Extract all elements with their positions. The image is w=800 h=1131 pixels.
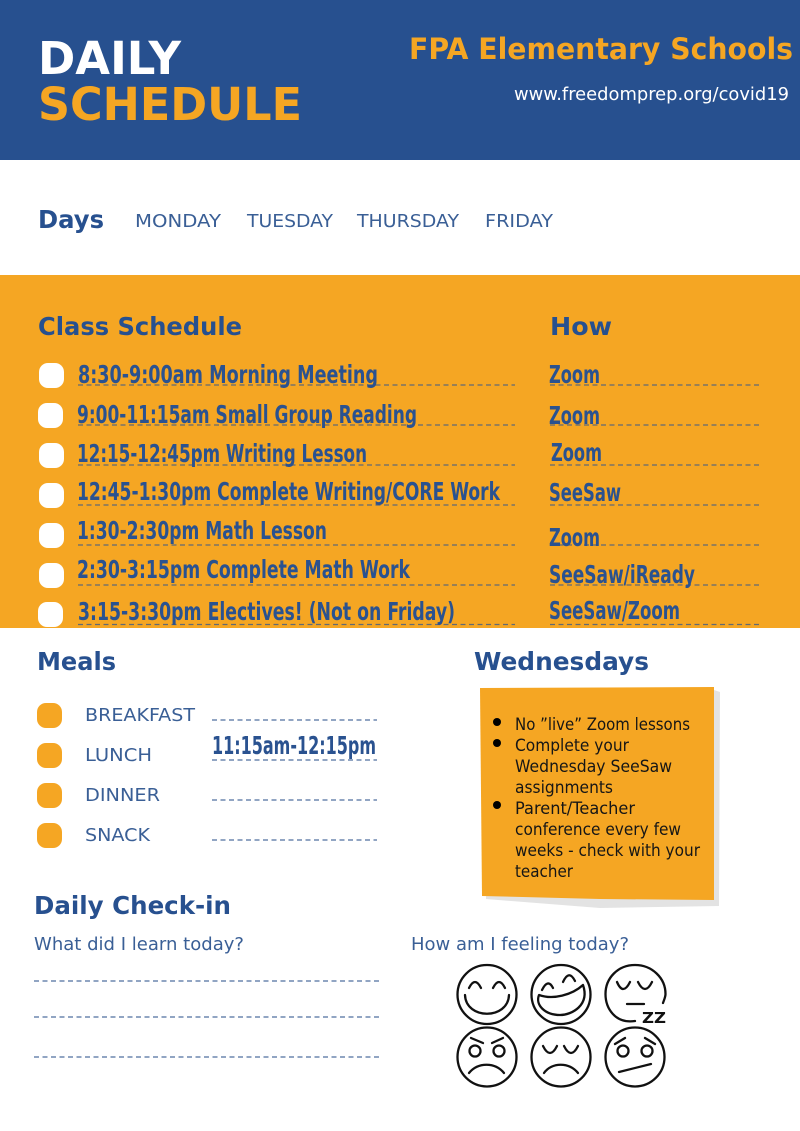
learn prompt: What did I learn today? bbox=[34, 935, 244, 955]
schedule items: 8:30-9:00am Morning Meeting bbox=[78, 360, 378, 389]
delivery methods: SeeSaw/Zoom bbox=[549, 596, 680, 625]
day labels: THURSDAY bbox=[356, 211, 460, 232]
schedule items bbox=[77, 360, 501, 626]
meals heading: Meals bbox=[37, 647, 116, 676]
lunch time: 11:15am-12:15pm bbox=[212, 731, 376, 760]
school name: FPA Elementary Schools bbox=[409, 32, 793, 66]
meal labels: LUNCH bbox=[85, 745, 152, 766]
day labels: MONDAY bbox=[135, 211, 222, 232]
bullet list bbox=[493, 715, 700, 882]
meal labels: DINNER bbox=[85, 785, 160, 806]
bullet list: weeks - check with your bbox=[515, 841, 700, 861]
title: DAILY bbox=[38, 32, 182, 85]
feeling prompt: How am I feeling today? bbox=[411, 935, 629, 955]
panel: class schedule bbox=[0, 275, 800, 628]
meal labels: SNACK bbox=[85, 825, 151, 846]
days heading: Days bbox=[38, 205, 104, 234]
sticky note bbox=[480, 687, 714, 900]
day labels bbox=[135, 211, 554, 232]
days row bbox=[38, 205, 554, 234]
meal labels: BREAKFAST bbox=[85, 705, 196, 726]
check-in heading: Daily Check-in bbox=[34, 891, 231, 920]
schedule items: 12:45-1:30pm Complete Writing/CORE Work bbox=[77, 477, 501, 506]
schedule items: 12:15-12:45pm Writing Lesson bbox=[77, 439, 367, 468]
schedule items: 3:15-3:30pm Electives! (Not on Friday) bbox=[78, 597, 455, 626]
panel: daily check-in bbox=[34, 891, 666, 1086]
delivery methods: SeeSaw/iReady bbox=[549, 560, 695, 589]
bullet list: Wednesday SeeSaw bbox=[515, 757, 672, 777]
bullet list: assignments bbox=[515, 778, 613, 798]
schedule items: 2:30-3:15pm Complete Math Work bbox=[77, 555, 411, 584]
bullet list: Parent/Teacher bbox=[515, 799, 635, 819]
icon: sleeping face: ZZ bbox=[642, 1009, 666, 1027]
class schedule heading: Class Schedule bbox=[38, 312, 242, 341]
icon: angry face bbox=[458, 1028, 516, 1086]
how heading: How bbox=[550, 312, 612, 341]
title: SCHEDULE bbox=[38, 78, 302, 131]
meal labels bbox=[85, 705, 196, 846]
schedule items: 1:30-2:30pm Math Lesson bbox=[77, 516, 327, 545]
delivery methods: Zoom bbox=[549, 523, 600, 552]
panel: wednesdays bbox=[474, 647, 720, 908]
website: www.freedomprep.org/covid19 bbox=[514, 84, 789, 105]
icon: happy face bbox=[458, 965, 516, 1024]
bullet list: teacher bbox=[515, 862, 573, 882]
day labels: FRIDAY bbox=[485, 211, 554, 232]
delivery methods: Zoom bbox=[549, 360, 600, 389]
sticky note shadow bbox=[486, 690, 720, 908]
bullet list: No ”live” Zoom lessons bbox=[515, 715, 690, 735]
delivery methods bbox=[549, 360, 695, 625]
icon: laughing face bbox=[532, 965, 590, 1024]
title bbox=[38, 32, 302, 131]
delivery methods: Zoom bbox=[549, 401, 600, 430]
bullet list: conference every few bbox=[515, 820, 681, 840]
meal markers bbox=[37, 703, 62, 848]
bullet list: Complete your bbox=[515, 736, 629, 756]
checkboxes bbox=[38, 363, 64, 627]
icon: sad face bbox=[532, 1028, 590, 1086]
day labels: TUESDAY bbox=[246, 211, 334, 232]
panel: meals bbox=[37, 647, 377, 848]
dashed lines bbox=[78, 385, 762, 624]
header band bbox=[0, 0, 800, 160]
schedule items: 9:00-11:15am Small Group Reading bbox=[77, 400, 417, 429]
wednesdays heading: Wednesdays bbox=[474, 647, 649, 676]
icon: sleeping face bbox=[606, 965, 666, 1027]
delivery methods: SeeSaw bbox=[549, 478, 621, 507]
icon: unsure face bbox=[606, 1028, 664, 1086]
delivery methods: Zoom bbox=[551, 438, 602, 467]
